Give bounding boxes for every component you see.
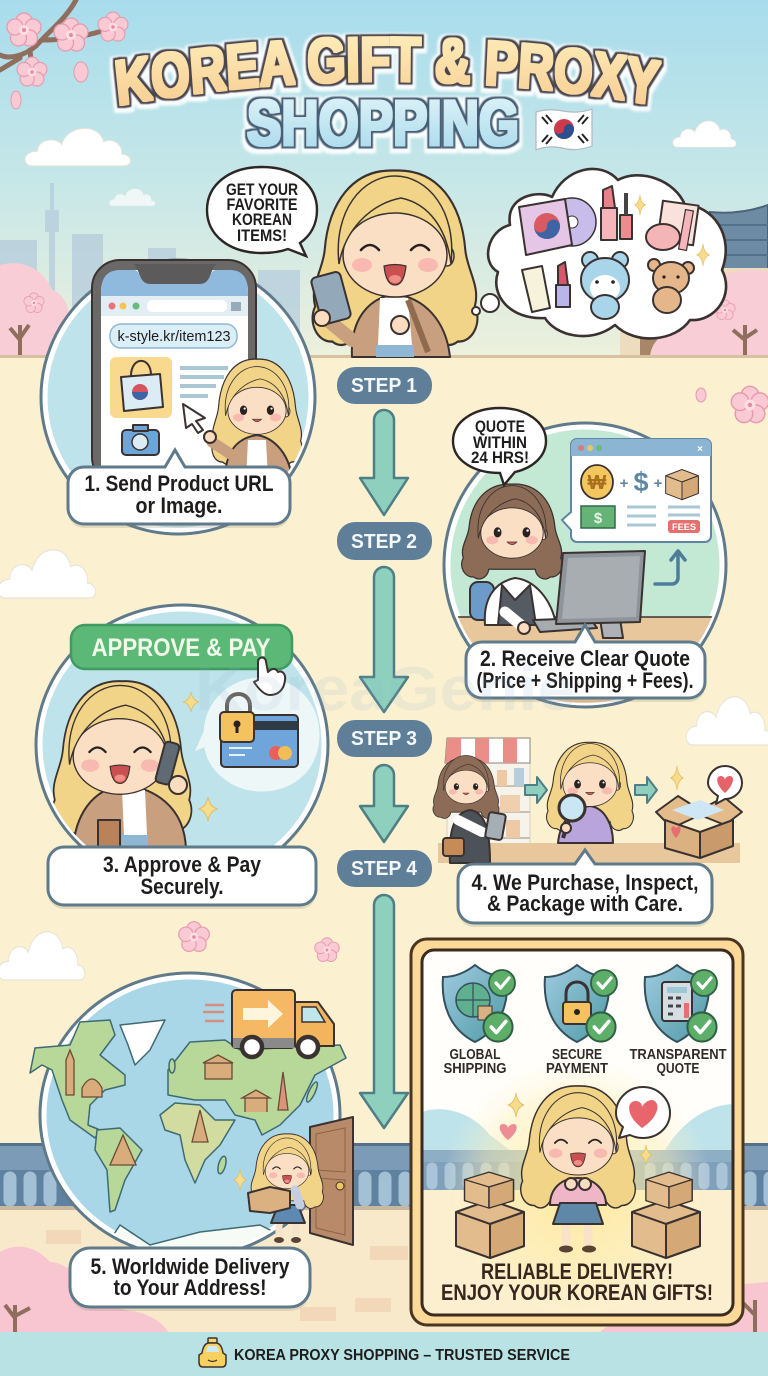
branch with blossoms xyxy=(0,0,128,109)
heart bubble xyxy=(616,1087,670,1138)
speech bubble: get your favorite items xyxy=(207,167,317,256)
speech bubble: quote within 24 hrs: QUOTE xyxy=(475,418,525,436)
cherry trees top xyxy=(0,263,768,358)
icon: shopping bag tile xyxy=(110,357,172,418)
label: step 2: 2. Receive Clear Quote xyxy=(480,646,690,671)
phone mockup xyxy=(92,260,256,485)
quote window: × xyxy=(697,444,703,455)
heart bubble xyxy=(708,766,742,804)
label: step 3: Securely. xyxy=(140,874,224,899)
arrow step 3 to 4 xyxy=(360,765,408,842)
closing message xyxy=(441,1259,713,1305)
icon: teddy bear xyxy=(648,259,694,313)
speech bubble: get your favorite items: ITEMS! xyxy=(237,227,287,245)
character pointing xyxy=(204,359,302,480)
url field: k-style.kr/item123 xyxy=(118,329,230,345)
panel: reliable delivery card xyxy=(411,939,743,1325)
badge: transparent quote: QUOTE xyxy=(656,1061,700,1077)
hanok roof right xyxy=(620,205,768,358)
icon: won coin xyxy=(581,465,613,499)
desk xyxy=(458,616,712,703)
parcels right xyxy=(632,1172,700,1258)
background sky xyxy=(0,0,768,360)
label: step 3: 3. Approve & Pay xyxy=(103,852,262,877)
thought cloud with korean items xyxy=(472,169,726,338)
closing message: RELIABLE DELIVERY! xyxy=(481,1259,673,1284)
label: step 5 xyxy=(70,1248,310,1311)
store shelves xyxy=(447,763,530,845)
delivery truck xyxy=(203,990,334,1057)
icon: cursor xyxy=(183,404,205,433)
panel: step 1 send url xyxy=(43,260,313,532)
panel: step 5 worldwide delivery xyxy=(30,975,353,1260)
icon: open box xyxy=(656,796,742,858)
label: step 2: (Price + Shipping + Fees). xyxy=(476,668,694,693)
scene: step 4 purchase inspect package xyxy=(433,738,742,863)
step pill 4: STEP 4 xyxy=(351,858,418,880)
approve and pay button xyxy=(71,625,292,669)
counter xyxy=(438,843,740,863)
label: step 1 xyxy=(68,450,290,528)
label: step 4 xyxy=(458,850,712,927)
closing message: ENJOY YOUR KOREAN GIFTS! xyxy=(441,1280,713,1305)
main character with phone xyxy=(310,170,477,357)
lower clouds and petals xyxy=(0,386,768,980)
panel: step 3 approve and pay xyxy=(34,604,330,846)
label: step 1: 1. Send Product URL xyxy=(84,471,274,496)
icon: won coin: ₩ xyxy=(588,472,607,494)
step pill 1: STEP 1 xyxy=(351,375,417,397)
panel: step 2 receive quote xyxy=(440,408,730,707)
icon: bill xyxy=(581,506,615,528)
door xyxy=(310,1117,353,1245)
ground upper xyxy=(0,355,768,1145)
step pill 4 xyxy=(337,850,432,887)
antarctica xyxy=(114,1224,272,1246)
speech bubble: get your favorite items: FAVORITE xyxy=(226,196,298,214)
arrow step 2 to 3 xyxy=(360,567,408,712)
label: step 5: to Your Address! xyxy=(114,1275,266,1300)
icon: card xyxy=(221,715,298,767)
footer bar xyxy=(0,1332,768,1376)
fees tag: FEES xyxy=(672,522,696,533)
skyline xyxy=(0,183,300,360)
character with box xyxy=(248,1134,323,1243)
world map land xyxy=(30,1020,346,1212)
watermark: KoreaGenie xyxy=(195,655,575,724)
payment bubble xyxy=(194,677,320,792)
badge: transparent quote xyxy=(630,965,727,1077)
icon: padlock xyxy=(220,694,254,742)
icon: album and cd xyxy=(519,198,596,255)
arrow step 1 to 2 xyxy=(360,410,408,515)
speech bubble: quote within 24 hrs: 24 HRS! xyxy=(471,449,529,467)
quote window: + xyxy=(654,475,663,492)
icon: lipstick and mascara xyxy=(601,186,646,240)
step pill 2 xyxy=(337,522,432,560)
badge: secure payment: PAYMENT xyxy=(546,1061,608,1077)
step pill 1 xyxy=(337,367,432,404)
label: step 4: & Package with Care. xyxy=(487,891,683,916)
wall and ground lower xyxy=(0,1143,768,1338)
panel scene background xyxy=(422,950,733,1325)
staff character xyxy=(462,484,562,634)
title xyxy=(108,32,668,159)
title line 2: SHOPPING xyxy=(247,87,519,159)
icon: camera xyxy=(122,425,159,455)
speech bubble: quote within 24 hrs: WITHIN xyxy=(473,434,527,452)
parcels left xyxy=(456,1172,524,1258)
badge: global shipping xyxy=(443,965,515,1077)
step pill 3: STEP 3 xyxy=(351,728,417,750)
speech bubble: get your favorite items: GET YOUR xyxy=(226,181,298,199)
character on phone xyxy=(53,681,191,855)
label: step 2 xyxy=(466,625,705,702)
step pill 3 xyxy=(337,720,432,757)
inspector girl with magnifier xyxy=(547,742,633,843)
icon: korean flag xyxy=(536,109,592,150)
quote window xyxy=(562,439,711,542)
speech bubble: quote within 24 hrs xyxy=(453,408,546,485)
landmarks xyxy=(66,1050,288,1165)
label: step 4: 4. We Purchase, Inspect, xyxy=(472,870,698,895)
title line 1: KOREA GIFT & PROXY xyxy=(108,32,668,114)
label: step 5: 5. Worldwide Delivery xyxy=(90,1254,290,1279)
store awning xyxy=(445,738,530,763)
badge: secure payment: SECURE xyxy=(552,1047,602,1063)
label: step 3 xyxy=(48,847,316,909)
icon: tube and lipstick xyxy=(522,262,570,312)
quote window: $ xyxy=(633,467,649,497)
badge: transparent quote: TRANSPARENT xyxy=(630,1047,727,1063)
happy character xyxy=(521,1086,635,1252)
fees tag xyxy=(668,520,700,533)
label: step 1: or Image. xyxy=(136,493,222,518)
badge: secure payment xyxy=(545,965,617,1077)
arrow step 4 to 5 xyxy=(360,895,408,1128)
footer bar: KOREA PROXY SHOPPING – TRUSTED SERVICE xyxy=(234,1347,570,1364)
shop staff xyxy=(433,755,506,863)
badge: global shipping: SHIPPING xyxy=(444,1061,506,1077)
speech bubble: get your favorite items: KOREAN xyxy=(232,211,292,229)
icon: arrow xyxy=(635,777,657,803)
icon: arrow xyxy=(525,777,547,803)
icon: bill: $ xyxy=(594,510,603,527)
badge: global shipping: GLOBAL xyxy=(450,1047,501,1063)
icon: parcel xyxy=(666,470,698,500)
quote window: + xyxy=(620,475,629,492)
approve and pay button: APPROVE & PAY xyxy=(92,634,271,662)
cherry tree bottom xyxy=(0,1247,768,1332)
clouds in sky xyxy=(25,121,736,206)
icon: cosmetics set xyxy=(646,201,709,266)
icon: taxi xyxy=(199,1338,226,1367)
url field xyxy=(110,324,237,348)
step pill 2: STEP 2 xyxy=(351,531,417,553)
icon: up arrow xyxy=(655,551,685,584)
keyboard and monitor xyxy=(533,551,645,638)
icon: blue plush xyxy=(581,252,629,319)
icon: hand cursor xyxy=(254,658,285,695)
small heart xyxy=(500,1124,517,1140)
